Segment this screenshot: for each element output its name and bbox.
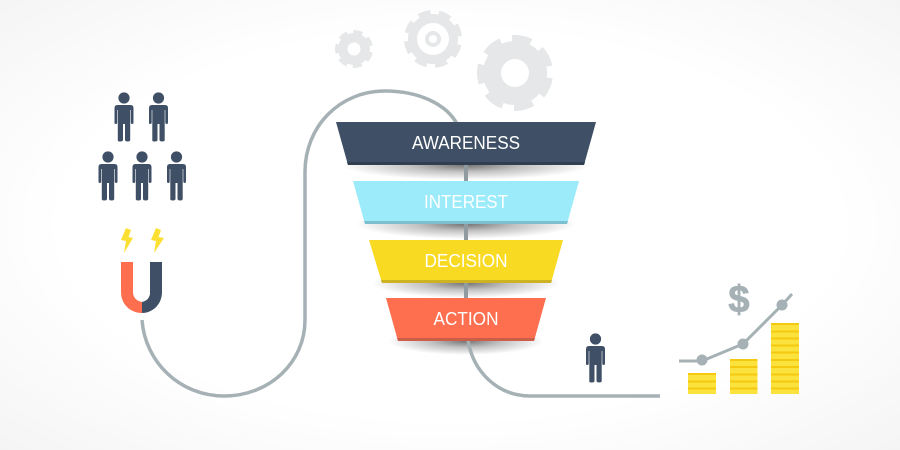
chart: coin stacks	[688, 323, 799, 394]
chart: growth trend line	[679, 294, 792, 366]
exit path to person	[468, 340, 660, 396]
icon: gears	[334, 8, 552, 110]
icon: dollar sign: $	[728, 279, 750, 321]
icon: person at end of path	[586, 333, 605, 382]
icon: large gear	[478, 36, 552, 110]
icon: medium gear	[402, 8, 464, 70]
coin stack 1	[688, 373, 716, 394]
coin stack 2	[730, 359, 758, 394]
funnel drop shadows	[341, 150, 591, 355]
stage: action: ACTION	[434, 309, 498, 329]
connecting path from magnet through funnel	[142, 91, 457, 396]
icon: lightning bolts	[121, 228, 164, 253]
icon: crowd of people	[98, 92, 186, 200]
icon: small gear	[334, 29, 374, 69]
stage: interest	[353, 181, 579, 224]
stage: interest: INTEREST	[424, 192, 508, 212]
stage: awareness: AWARENESS	[412, 133, 520, 153]
icon: magnet	[121, 262, 162, 313]
stage: decision: DECISION	[424, 251, 508, 271]
stage: action	[386, 298, 546, 341]
coin stack 3	[771, 323, 799, 394]
funnel centre line	[464, 160, 468, 300]
stage: decision	[369, 240, 563, 283]
funnel	[336, 122, 596, 341]
stage: awareness	[336, 122, 596, 165]
